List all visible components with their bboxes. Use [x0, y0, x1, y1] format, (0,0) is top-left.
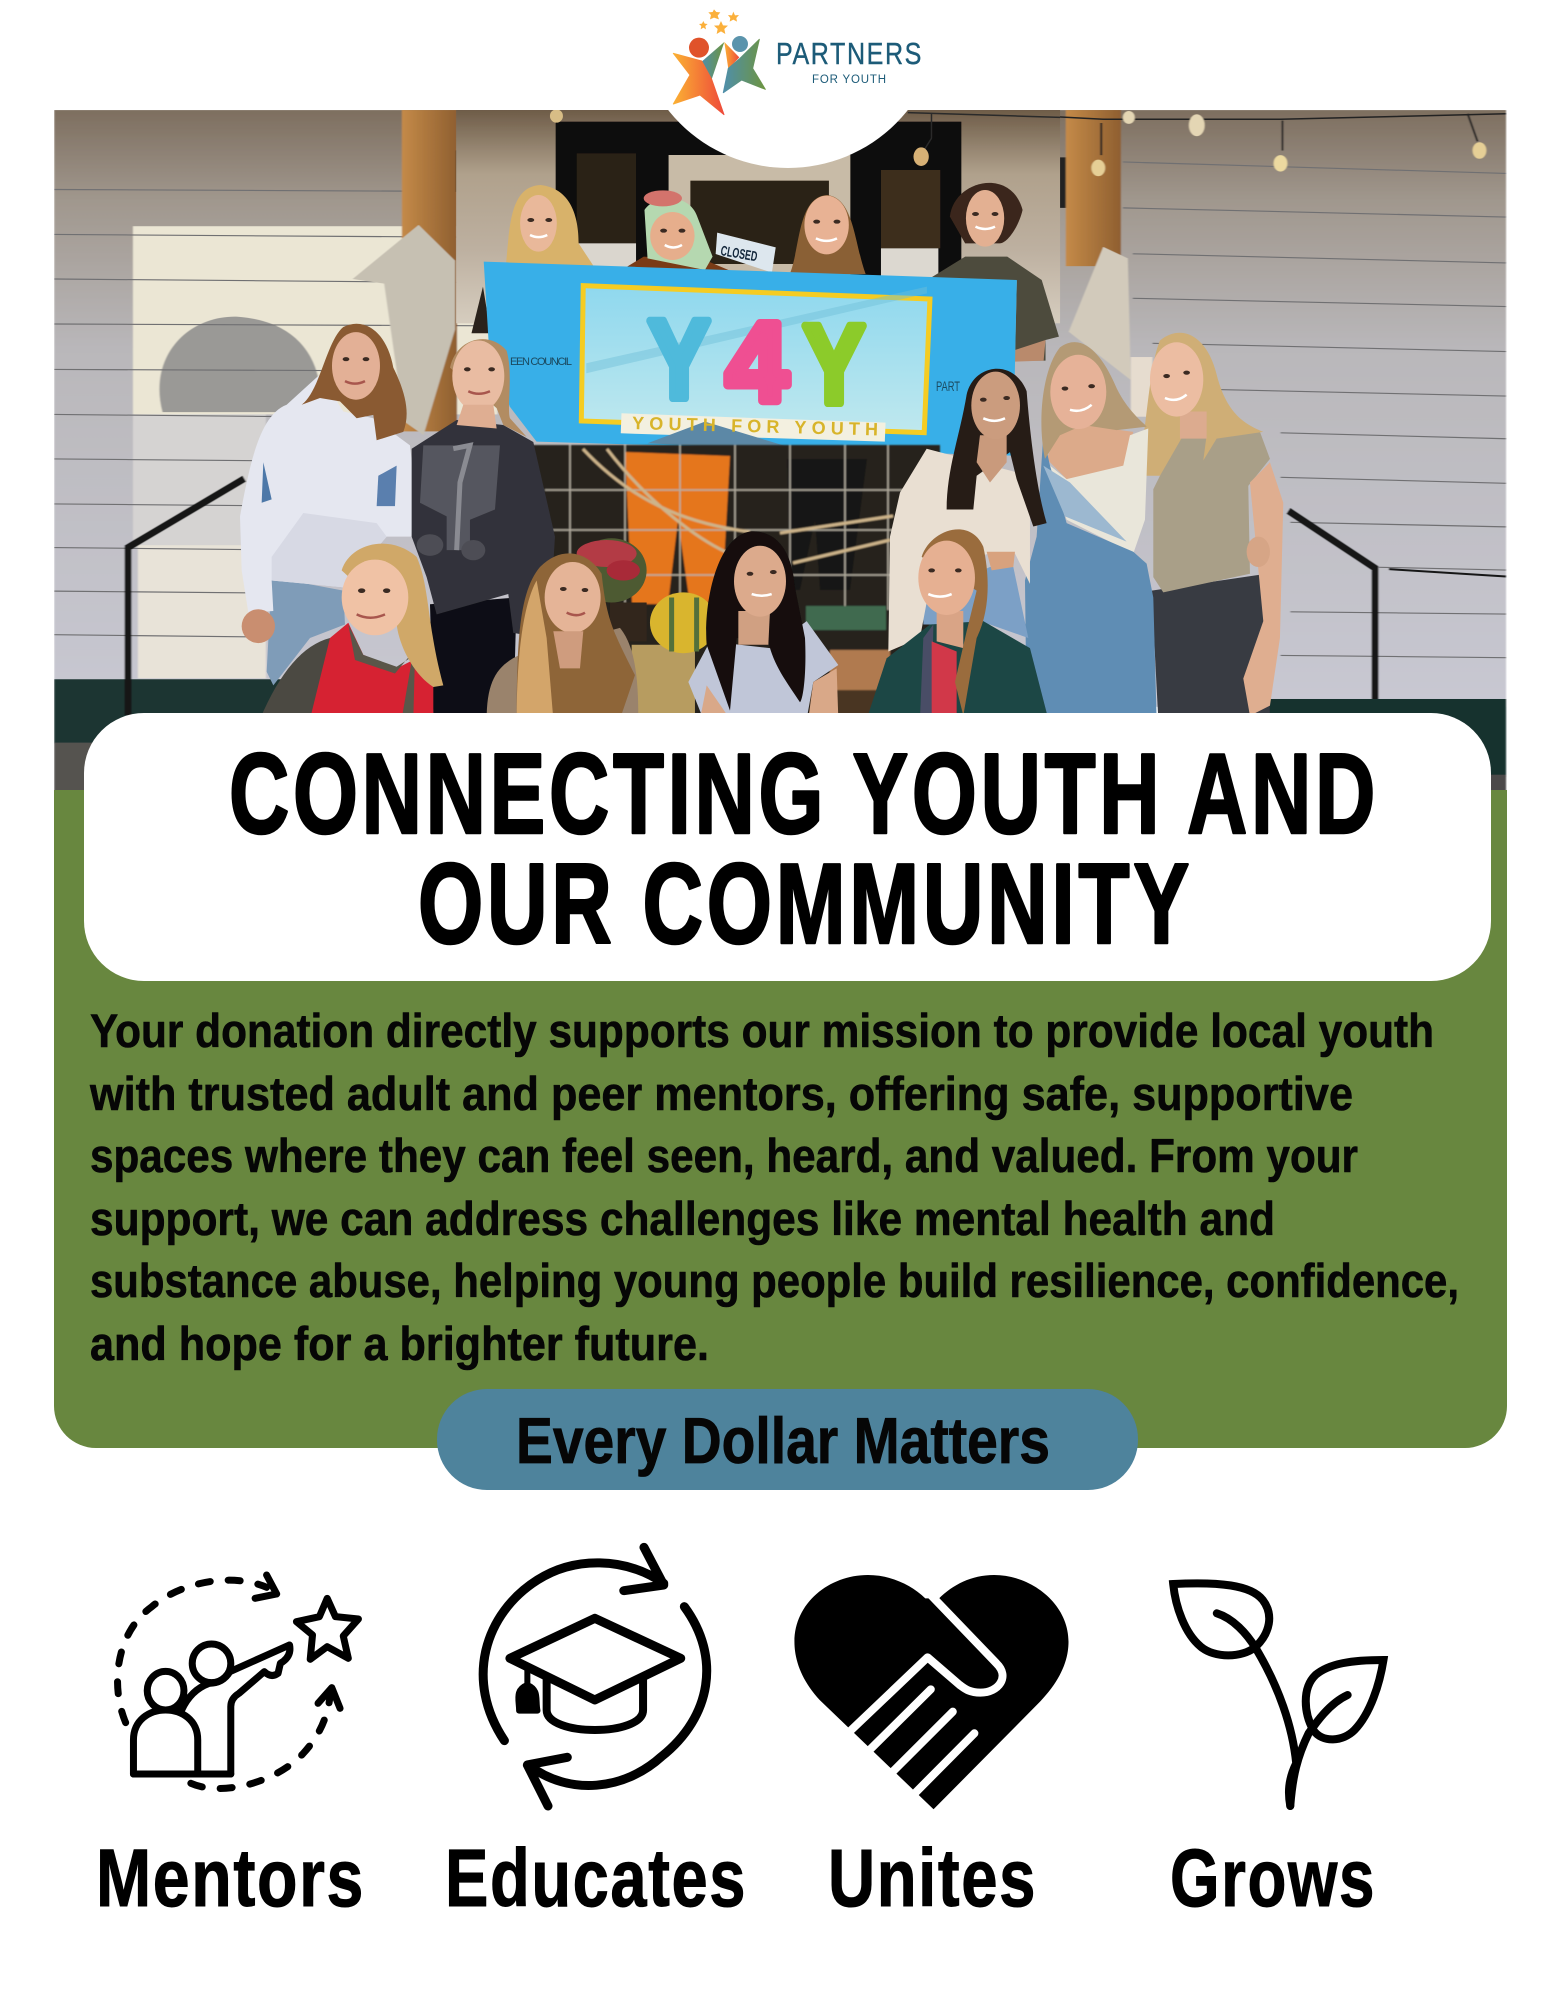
- banner partner logo text: PART: [936, 378, 960, 394]
- banner council logo text: EEN COUNCIL: [510, 356, 572, 368]
- mission paragraph: Your donation directly supports our mission to provide local youth: [90, 1004, 1434, 1057]
- door sign: CLOSED: [719, 242, 759, 264]
- mission paragraph: [89, 1004, 1459, 1370]
- string lights: [1044, 111, 1506, 176]
- icon: graduation cap with cycle arrows: [483, 1547, 707, 1806]
- girl in white hoodie: [240, 324, 415, 685]
- girl in taupe tee: [1137, 333, 1283, 719]
- icon: sprout: [1173, 1583, 1383, 1806]
- banner strapline: YOUTH FOR YOUTH: [632, 413, 878, 439]
- banner lettering: [510, 242, 960, 439]
- mission paragraph: spaces where they can feel seen, heard, and valued. From your: [90, 1129, 1358, 1182]
- banner letter Y green: Y: [803, 302, 865, 427]
- stair railings: [128, 479, 1506, 715]
- left group facial features: [343, 357, 588, 618]
- girl in denim overalls: [1025, 342, 1157, 719]
- logo mark: [673, 9, 765, 115]
- girl in green jacket: [867, 529, 1048, 719]
- icon: mentor pointing at star: [118, 1575, 358, 1788]
- logo backdrop arc: [635, 0, 941, 168]
- porch mesh, pants and ropes: [520, 445, 940, 725]
- autumn flowers, pumpkin and hay: [577, 538, 717, 721]
- door-side string bulbs: [550, 109, 1060, 166]
- woman behind banner left arm: [472, 286, 488, 334]
- Y4Y banner: [484, 262, 1017, 456]
- woman with rainbow hair: [627, 190, 729, 270]
- door and windows: [556, 122, 961, 278]
- banner number 4 pink: 4: [726, 300, 788, 425]
- woman with brown hair: [790, 195, 866, 274]
- warm wall around door: [456, 110, 1060, 323]
- left side people: [240, 324, 717, 721]
- right side people: [688, 333, 1283, 719]
- photo: youth group on porch: [54, 109, 1506, 793]
- label: Grows: Grows: [1170, 1833, 1376, 1924]
- title: [229, 731, 1379, 968]
- mission paragraph: with trusted adult and peer mentors, offering safe, supportive: [89, 1067, 1353, 1120]
- label: Mentors: Mentors: [96, 1833, 365, 1924]
- porch posts: [402, 110, 1121, 431]
- seated girl in tan pullover: [487, 553, 638, 719]
- logo tagline: FOR YOUTH: [812, 74, 886, 86]
- green mission panel: [54, 790, 1507, 1448]
- icon: handshake heart: [794, 1575, 1069, 1809]
- title: OUR COMMUNITY: [418, 841, 1193, 968]
- dark foundation: [54, 679, 1506, 793]
- pill: Every Dollar Matters: Every Dollar Matters: [516, 1404, 1050, 1477]
- label: Educates: Educates: [445, 1833, 747, 1924]
- young man: [929, 183, 1059, 362]
- title card: [84, 713, 1491, 981]
- label: Unites: Unites: [828, 1833, 1037, 1924]
- wall siding: [54, 110, 1506, 707]
- logo: Partners for Youth: [673, 9, 923, 115]
- woman with blond hair: [506, 185, 594, 267]
- mission paragraph: support, we can address challenges like mental health and: [90, 1192, 1275, 1245]
- doorway, back row and banner: [456, 109, 1060, 456]
- mission paragraph: and hope for a brighter future.: [90, 1317, 709, 1370]
- pill: Every Dollar Matters: [437, 1389, 1138, 1490]
- girl with glasses: [688, 531, 838, 719]
- tulle post decorations: [353, 225, 1131, 435]
- right group facial features: [747, 371, 1190, 597]
- girl in white cardigan: [888, 369, 1047, 652]
- banner letter Y blue: Y: [648, 297, 710, 422]
- girl in skeleton sweatshirt: [412, 339, 555, 719]
- back row facial features: [527, 212, 998, 247]
- logo wordmark: PARTNERS: [776, 36, 923, 71]
- girl in red vest: [260, 544, 443, 719]
